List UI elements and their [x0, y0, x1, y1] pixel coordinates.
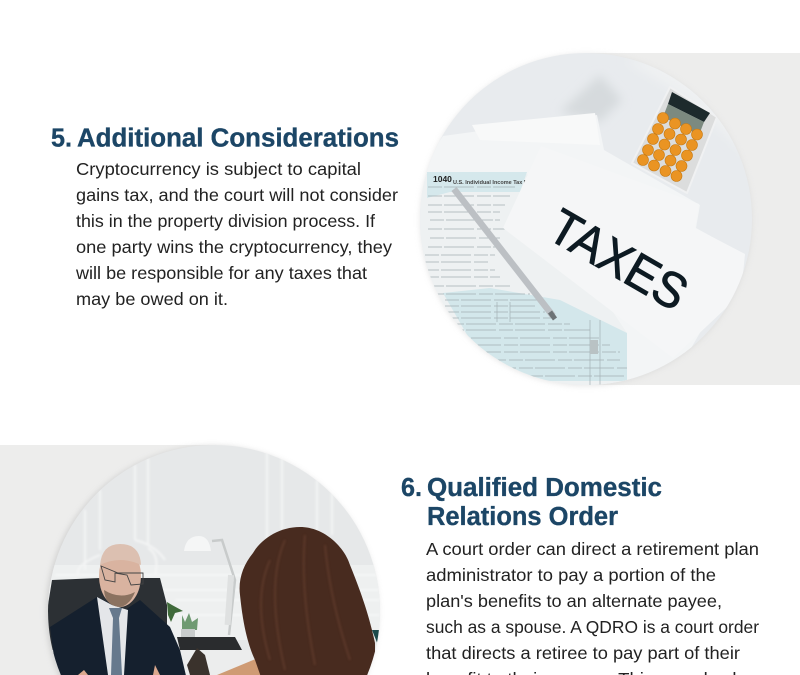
panel: qualified domestic relations order background band — [0, 445, 214, 675]
tax form 1040: 1040 — [433, 174, 452, 184]
section 5 body text: may be owed on it. — [76, 289, 228, 309]
head — [99, 544, 143, 607]
section 6 body text: that directs a retiree to pay part of their — [426, 643, 740, 663]
back papers — [426, 115, 700, 380]
woman's hair — [240, 527, 375, 675]
decorative figurine — [187, 648, 210, 675]
section 5 heading: Additional Considerations — [77, 124, 399, 152]
section 6 body text: administrator to pay a portion of the — [426, 565, 716, 585]
wall panelling — [82, 454, 332, 565]
panel: additional considerations background band — [586, 53, 800, 385]
photo: taxes paperwork and calculator — [420, 53, 752, 390]
section 6 body text: such as a spouse. A QDRO is a court order — [426, 617, 759, 637]
tax form 1040 — [420, 172, 627, 390]
TAXES lettering: TAXES — [540, 198, 697, 322]
section 5 body text: will be responsible for any taxes that — [75, 263, 367, 283]
section 5 body text: Cryptocurrency is subject to capital — [76, 159, 361, 179]
section 6 heading — [401, 474, 662, 531]
photo: man in suit meeting with a woman in an office — [46, 445, 380, 675]
section 6 heading: Qualified Domestic — [427, 474, 662, 502]
section 6 body text — [426, 539, 759, 675]
section 6 body text: A court order can direct a retirement plan — [426, 539, 759, 559]
calculator — [632, 87, 717, 193]
office chair — [48, 578, 167, 650]
shirt and tie — [97, 597, 128, 675]
hands — [78, 665, 160, 675]
desk — [177, 637, 242, 650]
section 6 heading: Relations Order — [427, 503, 618, 531]
pencil — [454, 189, 555, 319]
suit — [50, 597, 187, 675]
section 6 heading: 6. — [401, 474, 422, 502]
section 6 body text: plan's benefits to an alternate payee, — [426, 591, 722, 611]
section 5 body text: gains tax, and the court will not consider — [76, 185, 398, 205]
section 5 body text — [75, 159, 398, 309]
section 5 body text: this in the property division process. If — [76, 211, 375, 231]
desk lamp — [184, 536, 235, 635]
TAXES paper — [504, 178, 745, 332]
section 5 body text: one party wins the cryptocurrency, they — [76, 237, 392, 257]
section 5 heading: 5. — [51, 124, 72, 152]
woman's blouse — [217, 658, 262, 675]
tax form 1040: U.S. Individual Income Tax Return — [453, 180, 542, 186]
plants — [167, 602, 198, 637]
